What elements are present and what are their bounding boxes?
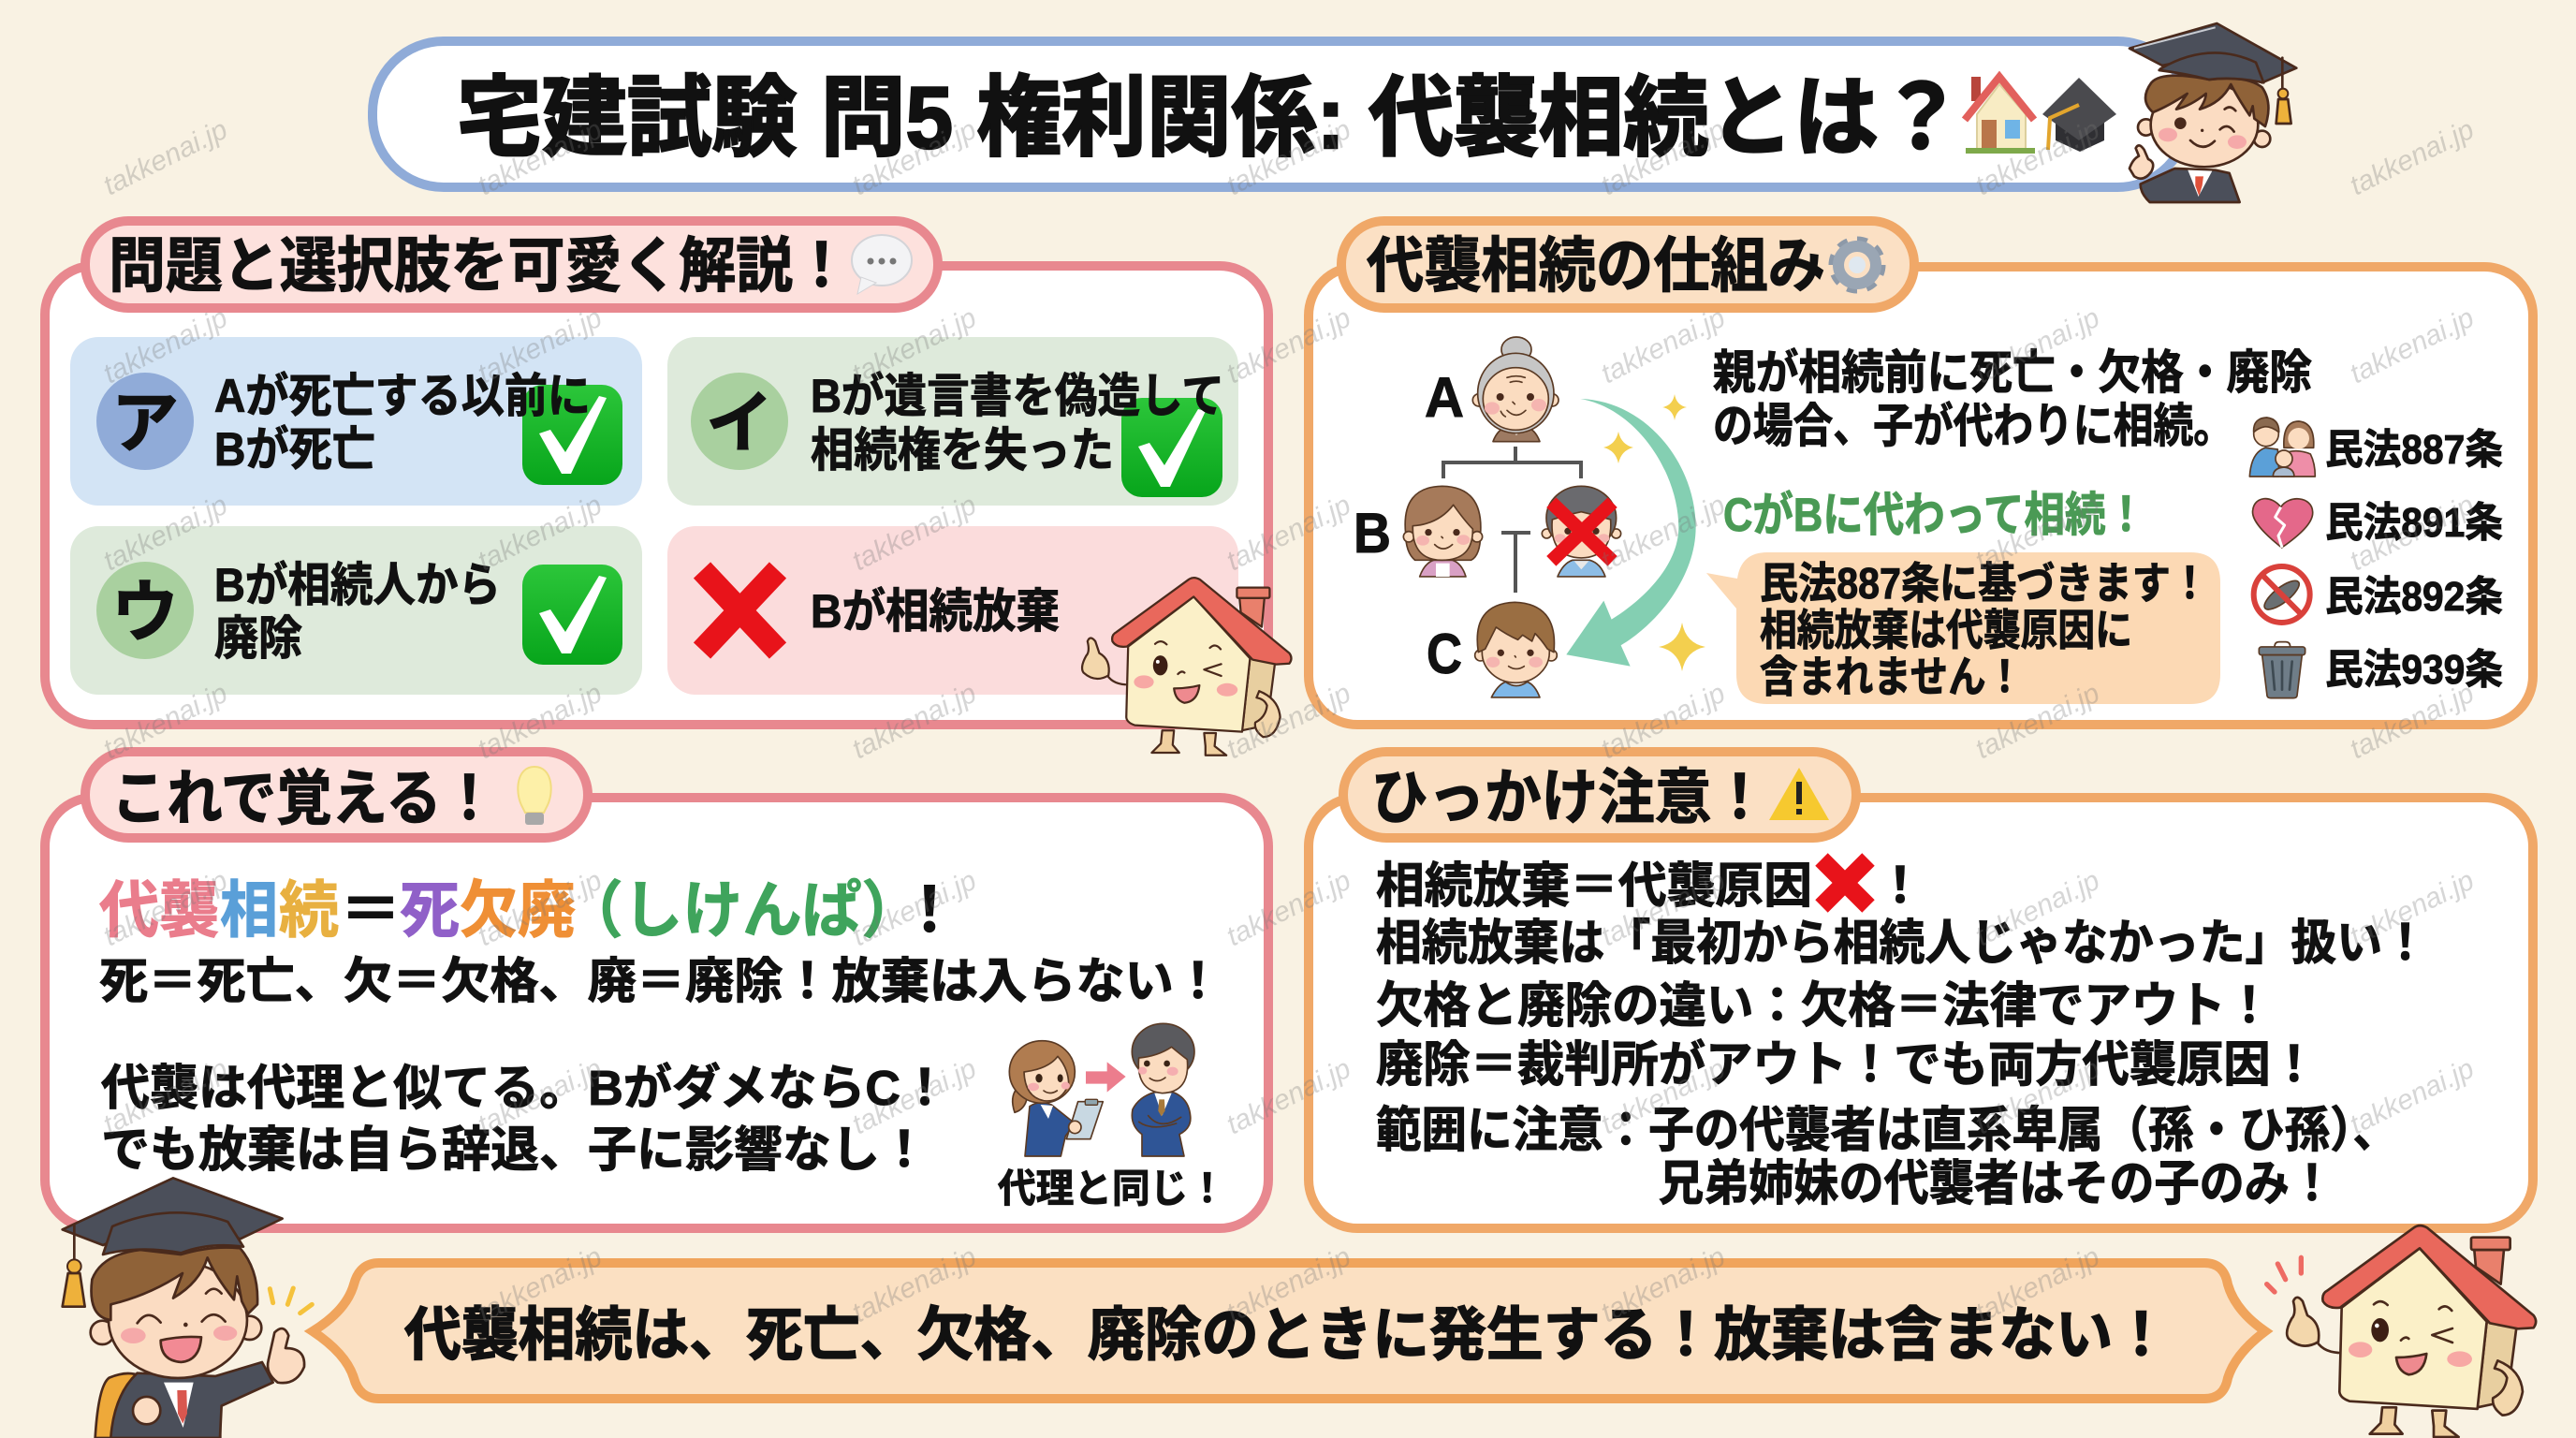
watermark grid: takkenai.jp (98, 865, 232, 952)
heading: remember this: これで覚える！ (111, 765, 497, 832)
icon: prohibition (2254, 566, 2310, 623)
explanation text: の場合、子が代わりに相続。 (1713, 400, 2233, 452)
explanation text: 親が相続前に死亡・欠格・廃除 (1713, 346, 2312, 399)
warning text (1376, 859, 2428, 1211)
watermark grid: takkenai.jp (1222, 302, 1355, 389)
watermark grid: takkenai.jp (1596, 678, 1730, 765)
watermark grid: takkenai.jp (98, 1053, 232, 1140)
mnemonic heading in colours: 相 (220, 875, 278, 945)
watermark grid: takkenai.jp (98, 490, 232, 577)
warning text: 欠格と廃除の違い：欠格＝法律でアウト！ (1376, 979, 2273, 1034)
watermark grid: takkenai.jp (98, 114, 232, 201)
banner text: 代襲相続は、死亡、欠格、廃除のときに発生する！放棄は含まない！ (404, 1303, 2170, 1368)
character: house bottom right (2267, 1225, 2536, 1437)
watermark grid: takkenai.jp (847, 678, 981, 765)
warning text: 範囲に注意：子の代襲者は直系卑属（孫・ひ孫）、 (1376, 1104, 2398, 1158)
watermark grid: takkenai.jp (1970, 302, 2104, 389)
illustration: agent handover (1009, 1023, 1194, 1156)
mnemonic heading in colours (99, 875, 960, 945)
watermark grid: takkenai.jp (1970, 865, 2104, 952)
watermark grid: takkenai.jp (847, 114, 981, 201)
callout: 相続放棄は代襲原因に (1760, 606, 2132, 654)
title banner (373, 41, 2188, 187)
icon: light bulb (518, 767, 551, 825)
heading: remember this (85, 752, 588, 838)
watermark grid: takkenai.jp (473, 490, 607, 577)
icon: check (522, 565, 622, 665)
watermark grid: takkenai.jp (1596, 1241, 1730, 1328)
green result text: CがBに代わって相続！ (1723, 489, 2146, 541)
mnemonic heading in colours: ＝ (340, 875, 402, 945)
choice ア: Bが死亡 (214, 423, 375, 476)
choice ア: ア (111, 387, 179, 462)
watermark grid: takkenai.jp (1970, 114, 2104, 201)
icon: house emoji (1965, 77, 2035, 154)
family tree (1354, 337, 1621, 697)
watermark grid: takkenai.jp (847, 490, 981, 577)
warning text: 兄弟姉妹の代襲者はその子のみ！ (1659, 1157, 2334, 1211)
tree connector lines (1443, 447, 1581, 593)
icon: broken heart (2253, 499, 2313, 548)
person C child: C (1427, 623, 1462, 685)
choice ウ: Bが相続人から (214, 559, 501, 611)
icon: red cross (702, 570, 778, 651)
explanation text (1713, 346, 2312, 452)
watermark grid: takkenai.jp (847, 865, 981, 952)
watermark grid: takkenai.jp (1970, 1241, 2104, 1328)
watermark grid: takkenai.jp (473, 302, 607, 389)
watermark grid: takkenai.jp (2345, 1053, 2479, 1140)
heading: mechanism (1341, 221, 1914, 308)
choice エ: Bが相続放棄 (811, 585, 1060, 638)
panel: problem and choices (45, 221, 1268, 725)
watermark grid: takkenai.jp (473, 865, 607, 952)
person A grandmother (1425, 337, 1559, 442)
watermark grid: takkenai.jp (1596, 865, 1730, 952)
title text: 宅建試験 問5 権利関係: 代襲相続とは？ (457, 68, 1964, 167)
choice ア: Aが死亡する以前に (214, 370, 591, 422)
mnemonic heading in colours: 続 (279, 875, 339, 945)
person A grandmother: A (1425, 366, 1464, 429)
label: 民法892条: 民法892条 (2325, 574, 2503, 620)
analogy text: 代襲は代理と似てる。BがダメならC！ (101, 1062, 949, 1116)
mnemonic heading in colours: （しけんぱ） (564, 875, 921, 945)
warning text: ！ (1876, 859, 1925, 914)
icon: red cross (1822, 859, 1868, 906)
character: student top right (2130, 23, 2296, 202)
mnemonic heading in colours: ！ (899, 875, 960, 945)
choice イ (667, 337, 1238, 506)
watermark grid: takkenai.jp (2345, 302, 2479, 389)
watermark grid: takkenai.jp (473, 114, 607, 201)
watermark grid: takkenai.jp (1596, 302, 1730, 389)
analogy text: でも放棄は自ら辞退、子に影響なし！ (101, 1123, 929, 1178)
icon: check (522, 385, 622, 485)
watermark grid: takkenai.jp (1596, 114, 1730, 201)
person B woman: B (1354, 502, 1391, 565)
mnemonic heading in colours: 死 (400, 875, 460, 945)
caption: same as agency: 代理と同じ！ (998, 1167, 1226, 1211)
heading: problem and choices: 問題と選択肢を可愛く解説！ (109, 232, 850, 300)
icon: graduation cap emoji (2042, 78, 2116, 152)
watermark grid: takkenai.jp (1222, 114, 1355, 201)
choice エ (667, 526, 1238, 695)
watermark grid: takkenai.jp (473, 1053, 607, 1140)
heading: mechanism: 代襲相続の仕組み (1367, 232, 1825, 300)
watermark grid: takkenai.jp (1970, 490, 2104, 577)
watermark grid: takkenai.jp (1970, 678, 2104, 765)
label: 民法887条: 民法887条 (2325, 427, 2503, 473)
watermark grid: takkenai.jp (1970, 1053, 2104, 1140)
watermark grid: takkenai.jp (1222, 490, 1355, 577)
analogy text (101, 1062, 949, 1178)
watermark grid: takkenai.jp (847, 1053, 981, 1140)
panel: remember this (45, 752, 1268, 1228)
person crossed out (1542, 486, 1621, 577)
choice ウ: 廃除 (214, 612, 302, 665)
icon: red cross over person (1551, 503, 1613, 561)
watermark grid: takkenai.jp (2345, 114, 2479, 201)
choice イ: イ (706, 387, 773, 462)
character: student bottom left (63, 1178, 312, 1438)
person B woman (1354, 486, 1483, 577)
mnemonic explanation: 死＝死亡、欠＝欠格、廃＝廃除！放棄は入らない！ (99, 955, 1222, 1009)
callout: 含まれません！ (1760, 653, 2024, 701)
watermark grid: takkenai.jp (473, 1241, 607, 1328)
panel: trap warning (1309, 752, 2533, 1228)
watermark grid: takkenai.jp (1596, 490, 1730, 577)
icon: speech bubble (852, 235, 912, 294)
icon: trash can (2259, 642, 2305, 698)
icon: sparkles (1603, 394, 1705, 671)
heading: trap warning (1343, 752, 1856, 838)
choice ア (70, 337, 642, 506)
callout (1706, 552, 2220, 704)
watermark grid: takkenai.jp (98, 678, 232, 765)
label: 民法939条: 民法939条 (2325, 647, 2503, 693)
warning text: 廃除＝裁判所がアウト！でも両方代襲原因！ (1376, 1038, 2318, 1093)
watermark grid: takkenai.jp (98, 302, 232, 389)
watermark grid: takkenai.jp (1222, 1241, 1355, 1328)
icon: gear (1834, 242, 1881, 288)
watermark grid: takkenai.jp (2345, 678, 2479, 765)
choice イ: 相続権を失った (811, 424, 1114, 477)
panel: mechanism of substitution (1309, 221, 2533, 725)
mnemonic heading in colours: 代襲 (99, 875, 219, 945)
heading: trap warning: ひっかけ注意！ (1371, 764, 1768, 831)
watermark grid: takkenai.jp (847, 302, 981, 389)
warning text: 相続放棄は「最初から相続人じゃなかった」扱い！ (1376, 917, 2428, 971)
label: 民法891条: 民法891条 (2325, 500, 2503, 546)
man (1132, 1023, 1194, 1156)
watermark grid: takkenai.jp (1222, 678, 1355, 765)
person C child (1427, 602, 1557, 697)
watermark grid (98, 114, 2479, 1328)
watermark grid: takkenai.jp (1222, 865, 1355, 952)
warning text: 相続放棄＝代襲原因 (1376, 859, 1812, 914)
choice ウ (70, 526, 642, 695)
choice イ: Bが遺言書を偽造して (811, 370, 1224, 422)
arrow: inheritance from A to C (1566, 399, 1696, 667)
icon: family (2249, 418, 2315, 477)
icon: pink arrow (1086, 1062, 1126, 1093)
watermark grid: takkenai.jp (2345, 490, 2479, 577)
callout: 民法887条に基づきます！ (1760, 559, 2209, 608)
woman (1009, 1041, 1103, 1156)
watermark grid: takkenai.jp (847, 1241, 981, 1328)
icon: warning triangle (1769, 768, 1829, 820)
choice ウ: ウ (111, 576, 179, 651)
mnemonic heading in colours: 欠廃 (460, 875, 576, 945)
character: house in choices panel (1082, 578, 1292, 756)
watermark grid: takkenai.jp (473, 678, 607, 765)
watermark grid: takkenai.jp (1222, 1053, 1355, 1140)
watermark grid: takkenai.jp (1596, 1053, 1730, 1140)
watermark grid: takkenai.jp (2345, 865, 2479, 952)
icon: check (1121, 398, 1222, 497)
bottom summary banner (313, 1263, 2265, 1399)
